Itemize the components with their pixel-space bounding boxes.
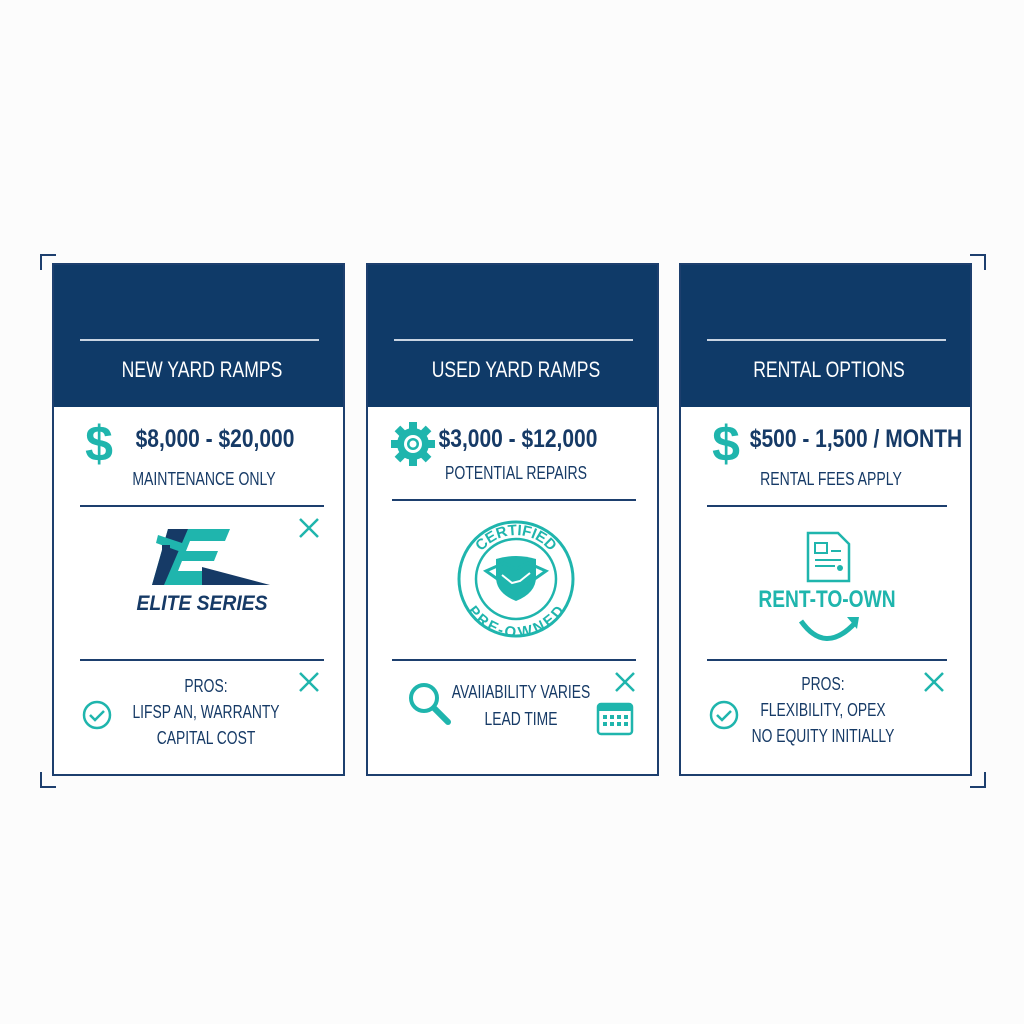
availability text: LEAD TIME xyxy=(485,709,557,729)
rent-to-own label: RENT-TO-OWN xyxy=(758,586,896,613)
icon: magnifier xyxy=(409,683,451,725)
price: $500 - 1,500 / MONTH xyxy=(750,425,962,453)
icon: check xyxy=(82,700,112,730)
price: $8,000 - $20,000 xyxy=(136,425,294,453)
logo text: ELITE SERIES xyxy=(137,592,267,615)
panel: rental options xyxy=(679,263,972,776)
pros text: FLEXIBILITY, OPEX xyxy=(760,700,886,720)
pros text xyxy=(752,674,894,746)
header: used: USED YARD RAMPS xyxy=(432,357,600,382)
pros text: PROS: xyxy=(184,676,228,696)
header: rental xyxy=(681,265,970,407)
icon: x xyxy=(615,672,635,692)
panel: used yard ramps xyxy=(366,263,659,776)
badge: certified pre-owned: PRE-OWNED xyxy=(470,605,562,634)
icon: dollar: $ xyxy=(712,416,740,472)
badge: certified pre-owned: CERTIFIED xyxy=(476,524,556,550)
icon: x xyxy=(299,672,319,692)
header: new xyxy=(54,265,343,407)
header: rental: RENTAL OPTIONS xyxy=(753,357,905,382)
price: $3,000 - $12,000 xyxy=(439,425,597,453)
icon: check xyxy=(710,700,738,730)
header: new: NEW YARD RAMPS xyxy=(122,357,282,382)
icon: x xyxy=(924,672,944,692)
icon: document xyxy=(806,532,850,582)
logo: elite series xyxy=(152,529,270,585)
pros text: NO EQUITY INITIALLY xyxy=(752,726,894,746)
badge: certified pre-owned xyxy=(458,520,574,638)
corner brackets xyxy=(40,254,56,270)
arrow: curved xyxy=(799,617,859,641)
subtext: POTENTIAL REPAIRS xyxy=(445,463,587,483)
subtext: MAINTENANCE ONLY xyxy=(132,469,276,489)
availability text: AVAIIABILITY VARIES xyxy=(452,682,590,702)
icon: gear xyxy=(391,422,435,466)
pros text: CAPITAL COST xyxy=(157,728,255,748)
pros text: LIFSP AN, WARRANTY xyxy=(132,702,280,722)
icon: dollar: $ xyxy=(85,416,113,472)
header: used xyxy=(368,265,657,407)
icon: x xyxy=(299,518,319,538)
pros text xyxy=(132,676,280,748)
subtext: RENTAL FEES APPLY xyxy=(760,469,902,489)
availability text xyxy=(452,682,590,729)
icon: calendar xyxy=(596,702,634,736)
pros text: PROS: xyxy=(801,674,845,694)
panel: new yard ramps xyxy=(52,263,345,776)
